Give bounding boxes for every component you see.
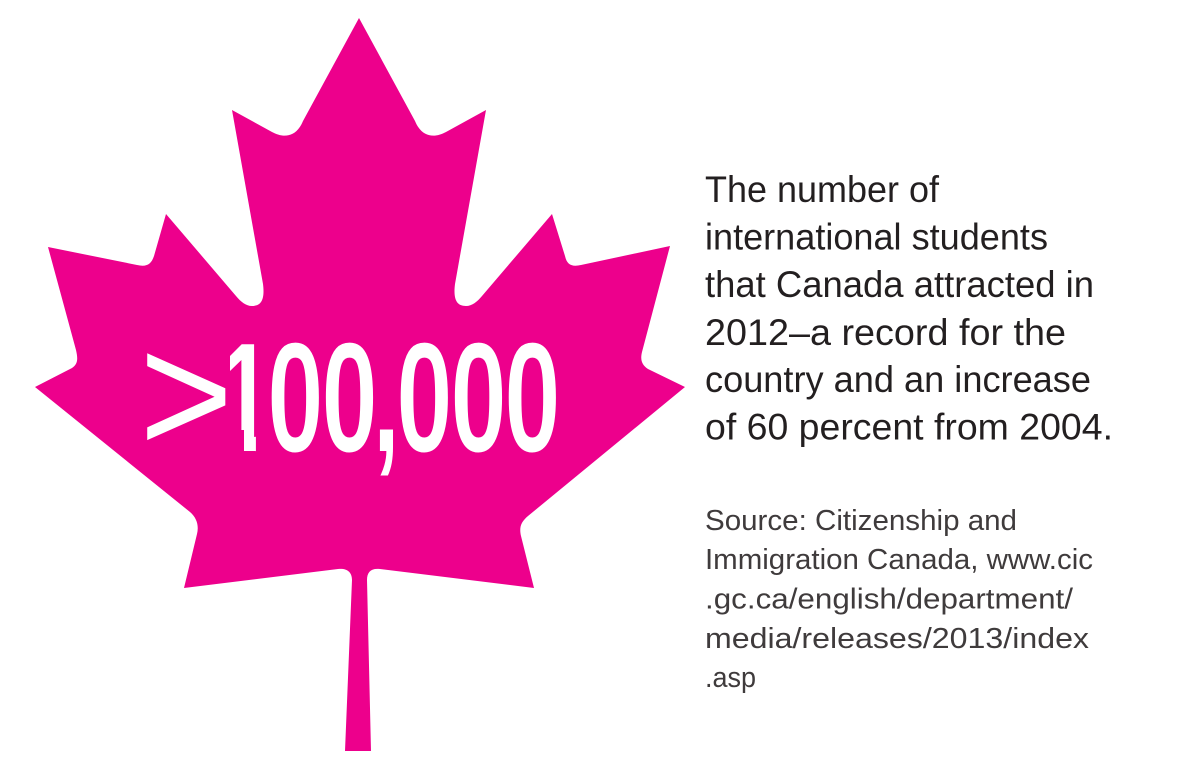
source text: media/releases/2013/index bbox=[705, 623, 1089, 655]
main description text: 2012–a record for the bbox=[705, 311, 1066, 353]
source text: Source: Citizenship and bbox=[705, 505, 1017, 537]
source text: .asp bbox=[705, 662, 756, 694]
main description text: The number of bbox=[705, 168, 940, 210]
big number: >100,000: 100,000 bbox=[217, 311, 561, 486]
big number: >100,000: > bbox=[139, 299, 233, 490]
source text: Immigration Canada, www.cic bbox=[705, 544, 1093, 576]
main description text: country and an increase bbox=[705, 358, 1091, 400]
main description text: that Canada attracted in bbox=[705, 263, 1094, 305]
maple leaf shape bbox=[35, 18, 685, 751]
big number: >100,000 bbox=[147, 342, 556, 476]
main description text: international students bbox=[705, 216, 1048, 258]
icon: pink maple leaf with statistic bbox=[35, 18, 685, 751]
source text: .gc.ca/english/department/ bbox=[705, 584, 1073, 616]
main description text bbox=[705, 168, 1113, 448]
source text bbox=[705, 505, 1093, 694]
main description text: of 60 percent from 2004. bbox=[705, 406, 1113, 448]
